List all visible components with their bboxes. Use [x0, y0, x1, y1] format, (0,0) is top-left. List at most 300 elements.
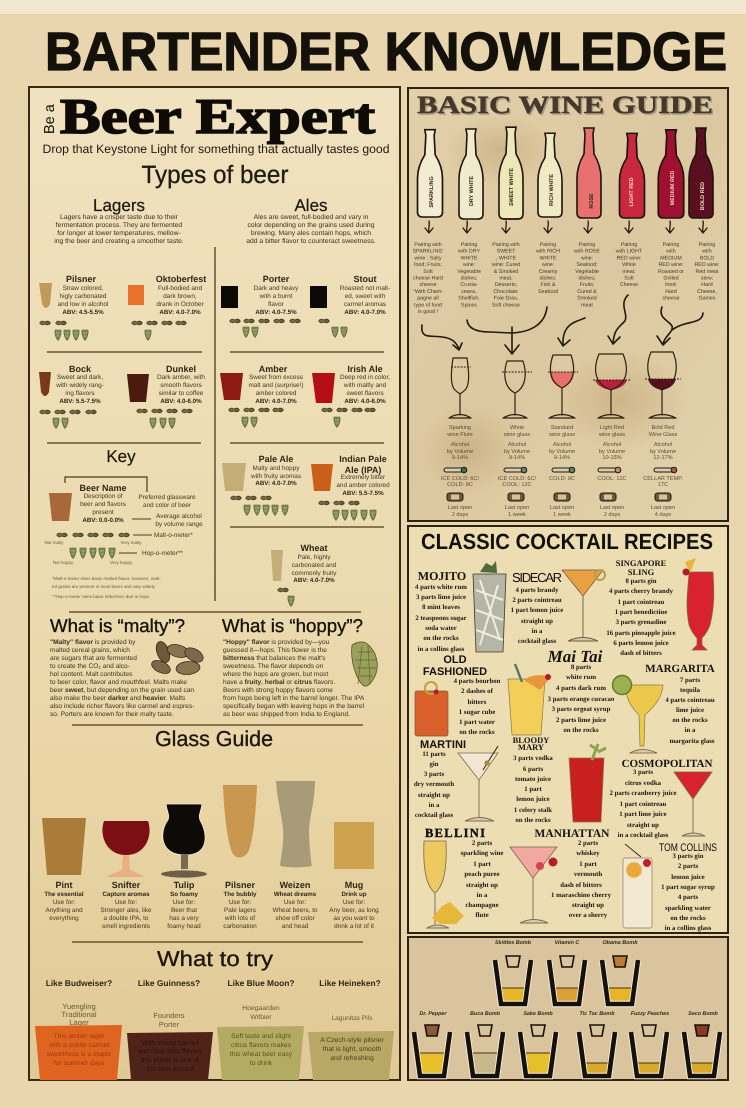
beer entry: stout: ABV: 4.0-7.0%: [344, 309, 386, 316]
beer entry: wheat: carbonated and: [292, 562, 337, 569]
recipe: bellini: peach puree: [464, 871, 500, 878]
glass: weizen: Weizen: [280, 880, 310, 890]
bottle: light red: Pairing: [621, 242, 637, 248]
beer entry: pilsner: [39, 274, 108, 340]
recipe: mai tai: 3 parts orange curacao: [548, 696, 615, 703]
bottle: dry white: DRY WHITE: [469, 176, 475, 206]
bottle: sparkling: SPARKLING: [429, 176, 435, 208]
bottle: rose: Smoked: [577, 296, 597, 302]
glass: weizen: Wheat beers, to: [272, 907, 318, 914]
bottle: rich white: RICH WHITE: [549, 174, 555, 206]
beer entry: amber: ABV: 4.0-7.0%: [255, 398, 297, 405]
glass: snifter: Snifter: [112, 880, 141, 890]
key: Very malty: [120, 540, 142, 545]
bottle: sweet white: Foie Gras,: [494, 296, 518, 302]
key: Preferred glassware: [138, 494, 196, 501]
column intro: ales: add a bitter flavor to counteract sweetness.: [246, 238, 376, 245]
recipe: martini: [414, 739, 498, 821]
recipe: mojito: in a collins glass: [418, 646, 465, 653]
column intro: ales: Ales: [294, 196, 328, 215]
section: what is hoppy: sweetness. The flavor depends on: [223, 663, 324, 670]
beer entry: wheat: Pale, highly: [297, 554, 331, 561]
bottle: rose: wine:: [581, 255, 593, 261]
bottle: sweet white: , WHITE: [496, 255, 516, 261]
bottle: medium red: Grilled: [663, 276, 679, 282]
recipe: tom collins: 2 parts: [678, 863, 698, 870]
beer entry: amber: malt and (surprise!): [248, 382, 304, 389]
beer entry: irish ale: [312, 364, 390, 428]
recipe: mojito: on the rocks: [423, 635, 459, 642]
section: what to try: [35, 947, 394, 1080]
beer entry: bock: Bock: [69, 364, 92, 374]
beer entry: bock: ABV: 5.5-7.5%: [59, 398, 101, 405]
section: what is malty: [50, 615, 206, 718]
beer entry: wheat: [271, 543, 337, 606]
beer entry: bock: with widely rang-: [55, 382, 104, 389]
recommendation: budweiser: Like Budweiser?: [46, 978, 112, 988]
glass: pilsner: Use for:: [229, 899, 251, 906]
glass: snifter: Stronger ales, like: [100, 907, 152, 914]
glass: bold red wine: Bold Red: [651, 424, 675, 431]
glass: light red wine: wine glass: [598, 431, 625, 438]
beer entry: porter: Dark and heavy: [254, 285, 299, 292]
recipe: mojito: 4 parts white rum: [415, 584, 467, 591]
section: what is hoppy: where the hops are grown, but most: [222, 671, 328, 678]
key: by volume range: [155, 521, 203, 528]
bottle: medium red: MEDIUM: [660, 255, 682, 261]
glass: white wine: 9-14%: [509, 455, 525, 461]
recipe: bloody mary: MARY: [518, 742, 544, 752]
bottle: light red: White: [622, 262, 636, 268]
recipe: sidecar: cocktail glass: [518, 638, 557, 645]
recipe: old fashioned: FASHIONED: [423, 666, 487, 678]
glass: snifter: smell ingredients: [102, 923, 150, 930]
bottle: dry white: Crusta-: [460, 282, 478, 288]
bottle: light red: meat;: [622, 269, 636, 275]
recommendation: blue moon: Soft taste and slight: [231, 1033, 291, 1040]
section: what is hoppy: What is “hoppy”?: [222, 615, 363, 636]
bottle: medium red: Pairing: [663, 242, 679, 248]
beer entry: bock: [39, 364, 104, 428]
section: what is malty: to create the CO₂ and alco-: [50, 663, 130, 670]
bottle: rose: [574, 128, 601, 308]
recipe: tom collins: 3 parts gin: [673, 853, 704, 860]
heading: basic wine guide: BASIC WINE GUIDE: [417, 92, 713, 119]
glass: bold red wine: Last open: [651, 505, 675, 511]
key: beer and flavors: [80, 501, 126, 508]
recipe: margarita: 7 parts: [680, 677, 700, 684]
section: what is hoppy: have a: [223, 679, 245, 686]
recipe: cosmopolitan: in a cocktail glass: [618, 832, 669, 839]
section: what is malty: so. Porters are known for their malty taste.: [50, 711, 174, 718]
glass: bold red wine: Wine Glass: [649, 431, 677, 438]
glass: mug: [329, 822, 379, 930]
beer entry: oktoberfest: drank in October: [156, 301, 204, 308]
bottle: rose: Cured &: [577, 289, 597, 295]
heading: be a (rotated): Be a: [42, 103, 58, 134]
recipe: manhattan: whiskey: [576, 850, 600, 857]
recipe: cosmopolitan: citrus vodka: [625, 780, 662, 787]
shot: tic tac bomb: [579, 1011, 615, 1076]
key: Hop-o-meter**: [142, 550, 183, 557]
recommendation: budweiser: sweetness is a staple: [47, 1051, 112, 1058]
bottle: sparkling: Soft: [423, 269, 433, 275]
bottle: dry white: dishes;: [461, 276, 477, 282]
section: what is hoppy: guessed it—hops. This flower is the: [223, 647, 327, 654]
recommendation: budweiser: for summer days: [54, 1060, 105, 1067]
glass: light red wine: Alcohol: [603, 441, 621, 448]
section: what is malty: What is “malty”?: [50, 615, 185, 636]
beer entry: ipa: Extremely bitter: [341, 474, 386, 481]
glass: sparkling flute: Last open: [448, 505, 472, 511]
key: and color of beer: [143, 502, 192, 509]
glass: white wine: Last open: [505, 505, 529, 511]
shot: seco bomb: [684, 1011, 720, 1076]
recipe: tom collins: sparkling water: [665, 905, 711, 912]
beer entry: ipa: ABV: 5.5-7.5%: [342, 490, 384, 497]
beer entry: porter: flavor: [268, 301, 285, 308]
beer entry: bock: ing flavors: [65, 390, 95, 397]
glass: bold red wine: by Volume: [650, 448, 676, 455]
beer entry: stout: Roasted not malt-: [340, 285, 390, 292]
glass: weizen: and head: [282, 923, 309, 930]
recommendation: guinness: Founders: [153, 1011, 185, 1020]
recipe: tom collins: 4 parts: [678, 894, 698, 901]
section: what is hoppy: "Hoppy" flavor: [223, 639, 270, 646]
recipe: manhattan: straight up: [572, 902, 604, 909]
recipe: cosmopolitan: 2 parts cranberry juice: [609, 790, 677, 797]
recipe: singapore sling: 8 parts gin: [626, 578, 657, 585]
glass: mug: as you want to: [333, 915, 375, 922]
recipe: old fashioned: 1 part water: [459, 719, 495, 726]
recipe: singapore sling: [606, 558, 714, 657]
glass: light red wine: by Volume: [599, 448, 625, 455]
bottle: dry white: WHITE: [460, 255, 478, 261]
column intro: lagers: [54, 196, 184, 245]
recipe: mojito: soda water: [425, 625, 457, 632]
glass: sparkling flute: 2 days: [452, 511, 468, 518]
shot: tic tac bomb: Tic Tac Bomb: [579, 1011, 615, 1017]
recipe: manhattan: 1 part: [579, 861, 598, 868]
recommendation: blue moon: Witbier: [250, 1014, 272, 1021]
heading: key: Key: [106, 447, 136, 466]
key: ed grains are present in most beers and vary widely: [52, 584, 156, 589]
section: what is malty: are sugars that are fermented: [50, 655, 137, 662]
bottle: rose: Fruits;: [580, 282, 594, 288]
recipe: bellini: 1 part: [473, 861, 492, 868]
glass: mug: Drink up: [341, 891, 367, 898]
recommendation: guinness: the best around: [146, 1066, 194, 1073]
bottle: sweet white: meat;: [499, 276, 513, 282]
heading: what to try: What to try: [157, 947, 273, 971]
recipe: old fashioned: [415, 654, 501, 736]
bottle: dry white: wine:: [463, 262, 475, 268]
bottle: sparkling: "With Cham-: [413, 289, 443, 295]
recipe: mai tai: 3 parts orgeat syrup: [552, 706, 611, 713]
recipe: singapore sling: 4 parts cherry brandy: [609, 588, 674, 595]
recommendation: guinness: this porter is one of: [141, 1057, 199, 1064]
bottle: dry white: ceans,: [461, 289, 477, 295]
beer entry: dunkel: ABV: 4.0-6.0%: [160, 398, 202, 405]
bottle: medium red: food;: [665, 282, 677, 288]
glass: mug: Mug: [345, 880, 363, 890]
glass: sparkling flute: wine Flute: [446, 431, 473, 438]
beer entry: irish ale: with maltly and: [343, 382, 387, 389]
recipe: bellini: flute: [475, 912, 489, 919]
bottle: medium red: MEDIUM RED: [670, 171, 676, 205]
beer entry: porter: [221, 274, 301, 338]
section: what is malty: malted cereal grains, which: [50, 647, 130, 654]
bottle: bold red: RED wine:: [694, 262, 720, 268]
recipe: mojito: 2 teaspoons sugar: [415, 615, 467, 622]
recipe: manhattan: over a sherry: [569, 912, 608, 919]
recommendation: guinness: With strong carmel: [142, 1040, 199, 1047]
bottle: sweet white: [492, 127, 523, 308]
bottle: bold red: [689, 128, 720, 302]
beer entry: ipa: [311, 454, 390, 520]
recipe: martini: 3 parts: [424, 771, 444, 778]
bottle: sweet white: Desserts;: [495, 282, 517, 288]
glass: snifter: Use for:: [115, 899, 137, 906]
recipe: bellini: champagne: [465, 902, 499, 909]
beer entry: dunkel: similar to coffee: [159, 390, 204, 397]
glass: pilsner: with lots of: [224, 915, 255, 922]
recipe: singapore sling: SINGAPORE: [616, 558, 667, 568]
bottle: light red: Cheese: [620, 282, 638, 288]
glass: pilsner: Pilsner: [225, 880, 256, 890]
recommendation: blue moon: Hoegaarden: [242, 1005, 280, 1012]
recipe: manhattan: vermouth: [574, 871, 602, 878]
recipe: margarita: tequila: [680, 687, 701, 694]
beer entry: amber: [220, 364, 304, 428]
glass: snifter: [100, 821, 152, 930]
recipe: bloody mary: BLOODY: [513, 735, 549, 745]
glass: white wine: Alcohol: [508, 441, 526, 448]
recommendation: heineken: Like Heineken?: [319, 978, 381, 988]
recipe: tom collins: on the rocks: [670, 915, 706, 922]
key: Not hoppy: [53, 560, 74, 565]
recipe: manhattan: 2 parts: [578, 840, 598, 847]
recipe: old fashioned: 4 parts bourbon: [454, 678, 501, 685]
panel: bomb shots: [408, 937, 728, 1080]
beer entry: wheat: Wheat: [300, 543, 328, 553]
beer entry: pilsner: higly carbonated: [60, 293, 107, 300]
recipe: mai tai: 8 parts: [571, 664, 591, 671]
recipe: bellini: in a: [477, 892, 488, 899]
bottle: dry white: with DRY: [458, 249, 480, 255]
bottle: sparkling: wine : Salty: [414, 255, 442, 261]
section: what is malty: is provided by: [93, 639, 136, 646]
bottle: rose: Pairing: [579, 242, 595, 248]
bottle: rich white: [536, 133, 562, 295]
beer entry: amber: amber colored: [256, 390, 297, 397]
recipe: singapore sling: 16 parts pineapple juice: [606, 630, 676, 637]
glass: white wine: wine glass: [503, 431, 530, 438]
shot: buca bomb: [467, 1011, 503, 1076]
recommendation: heineken: [308, 978, 394, 1080]
column intro: lagers: for longer at lower temperatures, mellow-: [57, 230, 181, 237]
recipe: margarita: on the rocks: [672, 717, 708, 724]
bottle: rich white: Creamy: [539, 269, 558, 275]
glass: pilsner: Pale lagers: [224, 907, 256, 914]
recipe: cosmopolitan: 1 part lime juice: [619, 811, 667, 818]
arrows: pairing to glass: [422, 295, 703, 354]
glass: white wine: [498, 361, 537, 518]
heading: types of beer: Types of beer: [142, 161, 288, 189]
recommendation: blue moon: citrus flavors makes: [231, 1042, 292, 1049]
glass: mug: Use for:: [343, 899, 365, 906]
glass: standard wine: 9-14%: [554, 455, 570, 461]
recipe: bloody mary: 1 part: [524, 786, 543, 793]
beer entry: amber: Sweet from excess: [249, 374, 303, 381]
bottle: rich white: dishes:: [540, 276, 556, 282]
beer entry: oktoberfest: ABV: 4.0-7.0%: [159, 309, 201, 316]
recipe: margarita: [612, 663, 715, 753]
recipe: margarita: lime juice: [676, 707, 704, 714]
glass: tulip: So foamy: [170, 891, 198, 898]
column intro: lagers: ing the beer and creating a smoother taste.: [54, 238, 184, 245]
shot: vitamin c: Vitamin C: [555, 940, 579, 946]
section: what is hoppy: as beer was shipped from India to England.: [223, 711, 350, 718]
shot: fuzzy peaches: [631, 1011, 669, 1076]
bottle: rich white: with RICH: [536, 249, 560, 255]
recipe: singapore sling: 6 parts lemon juice: [613, 640, 669, 647]
column intro: ales: brewing. Many ales contain hops, which: [251, 230, 371, 237]
bottle: sweet white: Soft cheese: [492, 302, 520, 308]
section: what is malty: beer: [50, 687, 65, 694]
section: what is hoppy: [222, 615, 377, 718]
bottle: light red: Soft: [624, 276, 634, 282]
beer entry: irish ale: ABV: 4.0-6.0%: [344, 398, 386, 405]
recipe: bloody mary: on the rocks: [515, 817, 551, 824]
shot: dr. pepper: [414, 1011, 450, 1076]
beer entry: pale ale: ABV: 4.0-7.0%: [255, 480, 297, 487]
beer entry: dunkel: Dark amber, with: [157, 374, 205, 381]
glass: standard wine: [548, 355, 578, 518]
recipe: bloody mary: tomato juice: [515, 776, 551, 783]
bottle: bold red: BOLD: [700, 255, 714, 261]
recipe: mai tai: on the rocks: [563, 727, 599, 734]
section: what is malty: also make the beer: [50, 695, 108, 702]
bottle: rich white: Fish &: [540, 282, 556, 288]
bottle: rose: Vegetable: [575, 269, 599, 275]
recipe: singapore sling: 1 part cointreau: [618, 599, 665, 606]
glass: snifter: Capture aromas: [102, 891, 150, 898]
glass: mug: Any beer, as long: [329, 907, 379, 914]
glass: standard wine: wine glass: [548, 431, 575, 438]
glass: weizen: Use for:: [284, 899, 306, 906]
bottle: sweet white: SWEET: [497, 249, 516, 255]
heading: classic cocktail recipes: CLASSIC COCKTAIL RECIPES: [421, 529, 713, 554]
shot: fuzzy peaches: Fuzzy Peaches: [631, 1011, 669, 1017]
bottle: rose: Seafood;: [576, 262, 598, 268]
glass: white wine: ICE COLD: 6C/: [498, 475, 537, 482]
glass: weizen: Wheat dreams: [274, 891, 317, 898]
recipe: bellini: [424, 826, 503, 928]
beer entry: amber: Amber: [259, 364, 288, 374]
bottle: sparkling: pagne all: [417, 296, 439, 302]
recipe: mojito: 8 mint leaves: [422, 604, 460, 611]
glass: bold red wine: 17C: [658, 482, 668, 488]
recipe: manhattan: dash of bitters: [560, 882, 602, 889]
bottle: light red: [616, 133, 644, 288]
recipe: singapore sling: SLING: [628, 567, 655, 577]
shot: buca bomb: Buca Bomb: [470, 1011, 501, 1017]
section: what is hoppy: is provided by—you: [270, 639, 330, 646]
glass: sparkling flute: Alcohol: [451, 441, 469, 448]
recommendation: blue moon: [217, 978, 304, 1080]
key: **Hop-o-meter rates basic bitterness due to hops: [52, 594, 150, 599]
bottle: sparkling: cheese: [419, 282, 437, 288]
heading: basic wine guide: BASIC WINE GUIDE: [418, 94, 714, 120]
beer entry: ipa: Indian Pale: [339, 454, 387, 464]
beer entry: irish ale: Deep red in color,: [340, 374, 390, 381]
glass: tulip: [161, 804, 207, 930]
recipe: manhattan: [510, 828, 612, 923]
recipe: martini: MARTINI: [420, 739, 466, 751]
section: what is hoppy: bitterness: [223, 655, 255, 662]
recipe: bloody mary: 6 parts: [523, 766, 543, 773]
glass: tulip: Use for:: [173, 899, 195, 906]
glass: light red wine: 2 days: [604, 511, 620, 518]
recipe: bellini: straight up: [466, 882, 498, 889]
section: what is hoppy: from hops being left in the barrel longer. The IPA: [223, 695, 365, 702]
bottle: sparkling: food; Fruits;: [414, 262, 442, 268]
recipe: bloody mary: lemon juice: [516, 796, 550, 803]
recipe: mai tai: white rum: [566, 674, 596, 681]
bottle: dry white: Pairing: [461, 242, 477, 248]
recommendation: guinness: Like Guinness?: [138, 978, 200, 988]
bottle: rich white: Pairing: [540, 242, 556, 248]
recipe: tom collins: [623, 842, 717, 932]
beer entry: porter: ABV: 4.0-7.5%: [255, 309, 297, 316]
bottle: sparkling: cheese Hard: [413, 276, 443, 282]
glass: sparkling flute: Sparking: [449, 424, 471, 431]
bottle: dry white: Vegetable: [457, 269, 481, 275]
recipe: martini: dry vermouth: [414, 781, 454, 788]
section: what is malty: darker and heavier. Malts: [108, 695, 185, 702]
shot: obama bomb: Obama Bomb: [602, 940, 638, 946]
icon: malted grains: [150, 640, 206, 676]
recommendation: blue moon: to drink: [250, 1060, 273, 1067]
glass: tulip: Beer that: [171, 907, 197, 914]
bottle: sparkling: SPARKLING': [413, 249, 443, 255]
recipe: tom collins: TOM COLLINS: [659, 842, 717, 854]
column intro: lagers: Lagers: [93, 196, 145, 215]
glass: pint: The essential: [44, 891, 84, 898]
recipe: sidecar: SIDECAR: [512, 570, 562, 585]
bottle: rich white: Seafood: [538, 289, 558, 295]
recipe: manhattan: MANHATTAN: [534, 828, 610, 840]
bottle: rich white: WHITE: [539, 255, 557, 261]
glass: light red wine: [593, 354, 630, 518]
recipe: old fashioned: 2 dashes of: [461, 688, 494, 695]
recipe: old fashioned: 1 sugar cube: [459, 709, 495, 716]
glass: bold red wine: CELLAR TEMP.: [643, 476, 683, 482]
recommendation: guinness: and chocolate flavors: [138, 1048, 203, 1055]
beer entry: pilsner: ABV: 4.5-5.5%: [62, 309, 104, 316]
beer entry: pale ale: with fruity aromas: [250, 473, 301, 480]
section: what is malty: sweet, but depending on the grain used can: [65, 687, 194, 694]
recommendation: heineken: A Czech-style pilsner: [320, 1037, 384, 1044]
key: [44, 447, 203, 599]
bottle: light red: with LIGHT: [616, 249, 643, 255]
recipe: martini: gin: [429, 761, 439, 768]
recipe: cosmopolitan: COSMOPOLITAN: [622, 758, 712, 770]
beer entry: pale ale: [222, 454, 301, 516]
column intro: lagers: fermentation process. They are fermented: [56, 222, 182, 229]
beer entry: dunkel: Dunkel: [166, 364, 196, 374]
